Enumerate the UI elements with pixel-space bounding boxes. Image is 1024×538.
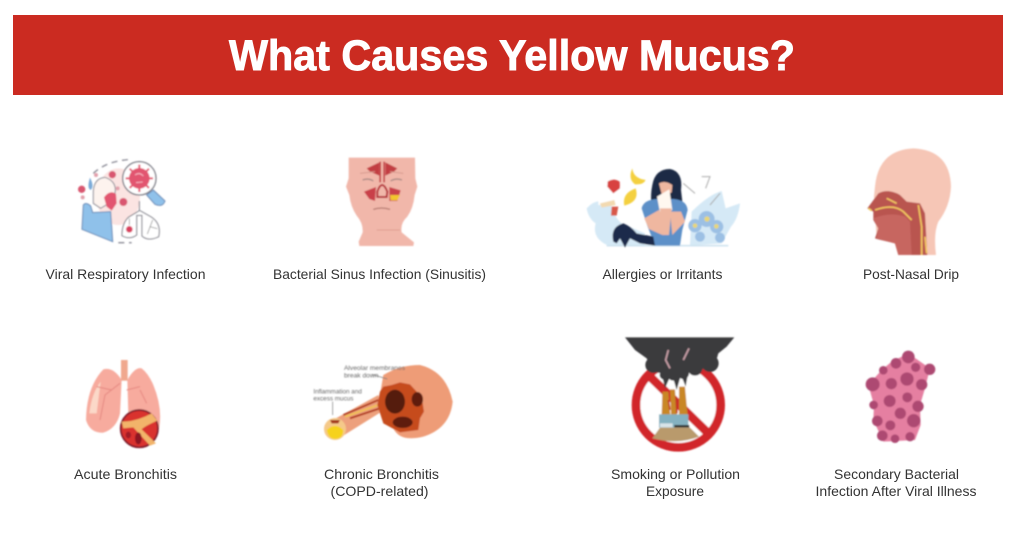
label: post-nasal drip: Post-Nasal Drip [863,266,959,282]
label: secondary bacterial infection [816,466,976,499]
label: smoking or pollution exposure: Exposure [646,483,704,499]
icon: bacteria cluster [866,351,935,443]
label: bacterial sinus infection: Bacterial Sinus Infection (Sinusitis) [273,266,486,282]
icon: post-nasal drip head [867,148,951,255]
icon: no smoking or pollution sign [625,337,734,447]
label: chronic bronchitis: (COPD-related) [330,483,428,499]
icon: allergies woman [587,168,740,248]
icon: chronic bronchitis airway: Inflammation and [313,388,362,395]
label: allergies or irritants: Allergies or Irritants [602,266,722,282]
label: smoking or pollution exposure [611,466,740,499]
label: acute bronchitis: Acute Bronchitis [74,466,177,482]
label: smoking or pollution exposure: Smoking or Pollution [611,466,740,482]
label: secondary bacterial infection: Secondary Bacterial [834,466,959,482]
icon: chronic bronchitis airway: excess mucus [313,395,353,402]
icon: chronic bronchitis airway [313,365,453,440]
icon: viral respiratory infection [78,159,165,243]
title: What Causes Yellow Mucus? [229,32,795,80]
icon: chronic bronchitis airway: break down [344,372,379,379]
label: chronic bronchitis [324,466,439,499]
icon: sinus infection face [346,158,417,246]
label: secondary bacterial infection: Infection After Viral Illness [816,483,976,499]
label: viral respiratory infection: Viral Respiratory Infection [46,266,206,282]
header banner [13,15,1003,95]
label: chronic bronchitis: Chronic Bronchitis [324,466,439,482]
icon: chronic bronchitis airway: Alveolar membranes [344,365,406,372]
icon: lungs with bronchitis inset [86,360,160,447]
